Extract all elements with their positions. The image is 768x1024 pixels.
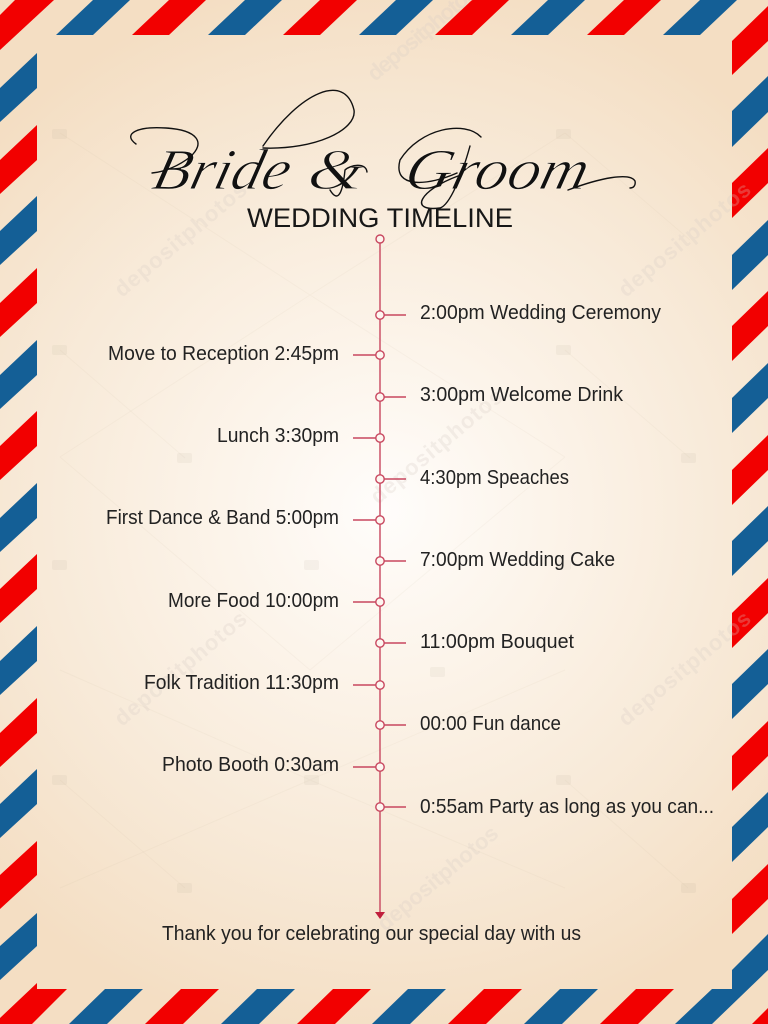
watermark: depositphotos [109,606,252,731]
airmail border: right stripes [732,6,768,934]
event: First Dance & Band 5:00pm: First Dance & Band 5:00pm [106,507,339,529]
event: 3:00pm Welcome Drink: 3:00pm Welcome Drink [420,384,624,406]
airmail border: left stripes [0,53,37,980]
event: 11:00pm Bouquet: 11:00pm Bouquet [420,631,574,653]
watermark: depositphotos [613,177,756,302]
title: Bride & Groom: Bride [147,138,299,202]
event: More Food 10:00pm: More Food 10:00pm [168,590,339,612]
event: 00:00 Fun dance: 00:00 Fun dance [420,713,561,735]
event: 4:30pm Speaches: 4:30pm Speaches [420,467,569,489]
airmail border: top stripes [0,0,737,50]
decorative flourishes [131,90,635,208]
title: Bride & Groom [131,90,635,208]
event: Folk Tradition 11:30pm: Folk Tradition 11:30pm [144,672,339,694]
airmail border: bottom stripes [0,934,768,1024]
watermark: depositphotos [613,606,756,731]
title: Bride & Groom: Groom [399,138,597,202]
event: Photo Booth 0:30am: Photo Booth 0:30am [162,754,339,776]
event: 0:55am Party as long as you can...: 0:55am Party as long as you can... [420,796,714,818]
timeline axis with arrow [375,243,385,919]
subtitle: wedding timeline: WEDDING TIMELINE [247,203,513,233]
event: 7:00pm Wedding Cake: 7:00pm Wedding Cake [420,549,615,571]
watermark: depositphotos [109,177,252,302]
event: Move to Reception 2:45pm: Move to Reception 2:45pm [108,343,339,365]
closing thank-you message: Thank you for celebrating our special day with us [162,923,581,945]
timeline start node [376,235,384,243]
watermark: depositphotos [372,820,503,936]
event: Lunch 3:30pm: Lunch 3:30pm [217,425,339,447]
watermark: depositphotos [365,384,508,509]
event: 2:00pm Wedding Ceremony: 2:00pm Wedding Ceremony [420,302,661,324]
title: Bride & Groom: & [304,137,370,202]
